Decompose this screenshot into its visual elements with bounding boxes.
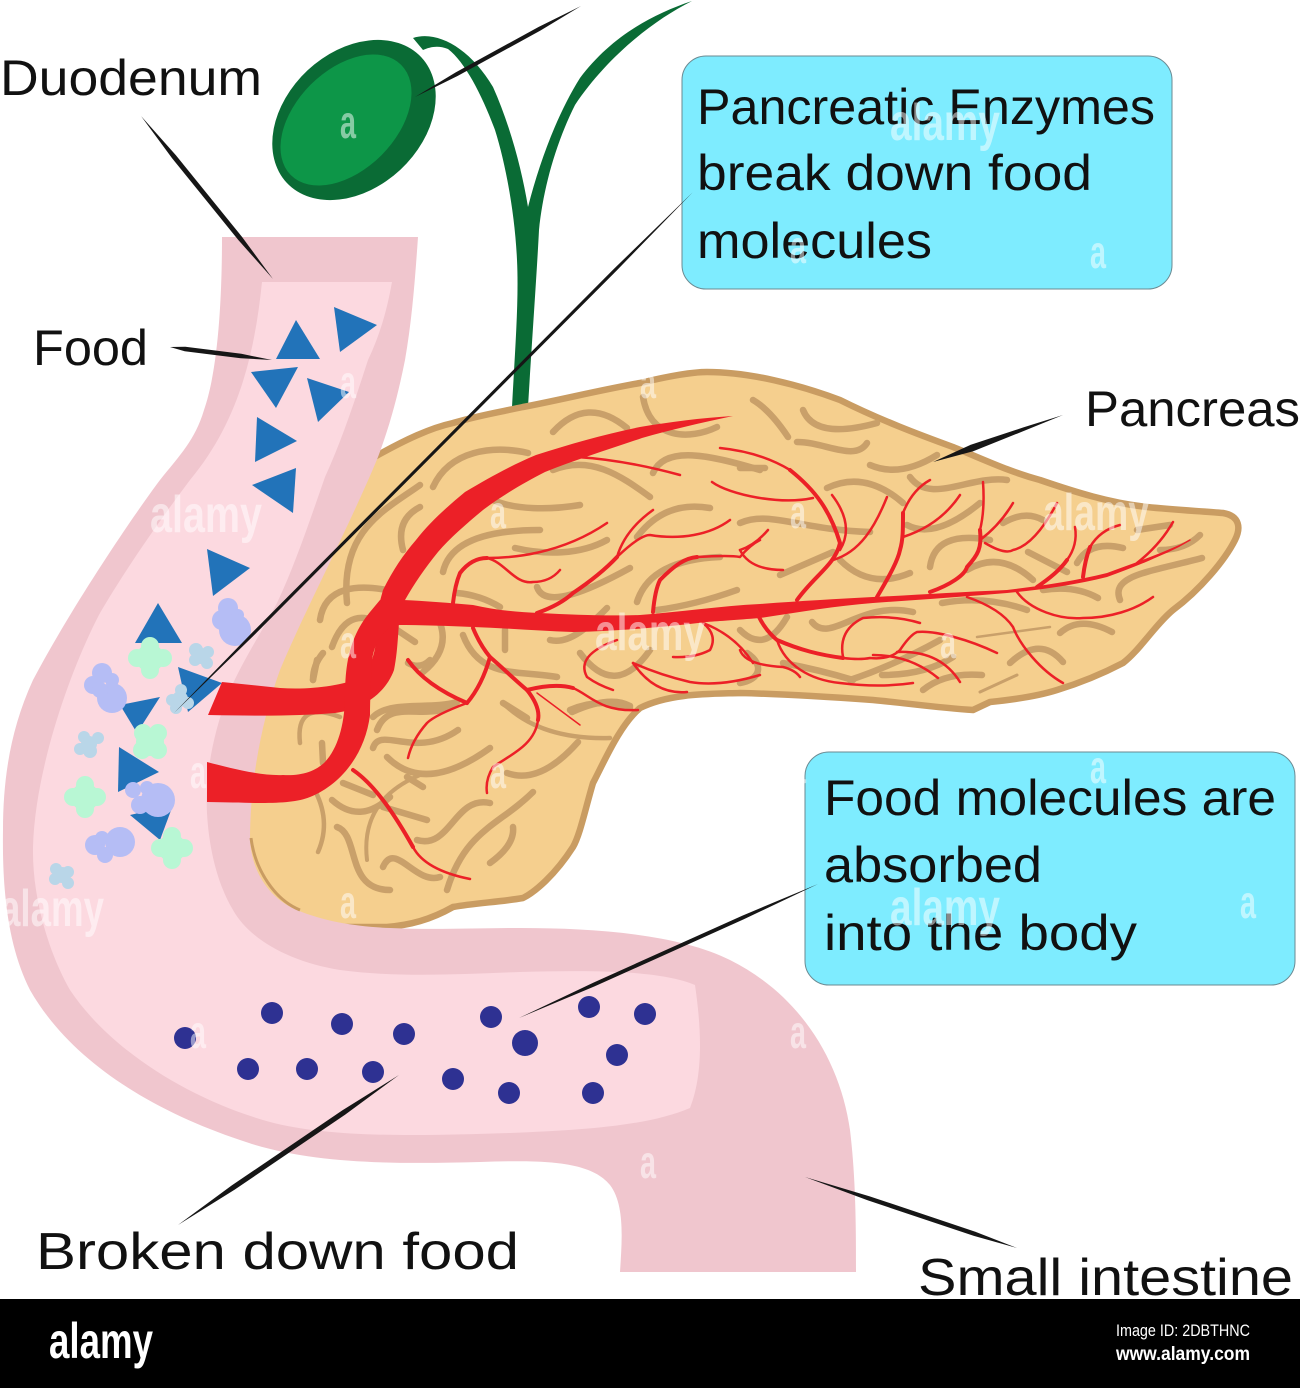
- watermarks: alamy: [0, 880, 104, 938]
- watermarks: a: [640, 1136, 656, 1188]
- intestine outer wall: [3, 237, 856, 1272]
- callout: food molecules absorbed: [805, 752, 1295, 985]
- watermarks: alamy: [890, 879, 1000, 937]
- pancreas lobule texture: [300, 397, 1202, 890]
- pancreas blood vessels: [207, 416, 1190, 879]
- label: Pancreas: Pancreas: [1085, 381, 1300, 437]
- watermarks: [0, 94, 1256, 1188]
- pointer: small intestine: [805, 1177, 1017, 1248]
- watermarks: a: [790, 221, 806, 273]
- label: Food: Food: [33, 320, 148, 376]
- footer logo: alamy: [49, 1313, 153, 1369]
- callout: pancreatic enzymes: molecules: [697, 213, 932, 269]
- label: Duodenum: Duodenum: [0, 50, 262, 106]
- watermarks: a: [790, 741, 806, 793]
- watermarks: a: [640, 356, 656, 408]
- pancreas body: [200, 372, 1238, 927]
- watermarks: a: [490, 486, 506, 538]
- pointer: food: [170, 347, 272, 360]
- small blue molecules: [49, 643, 214, 889]
- footer url: www.alamy.com: [1115, 1344, 1250, 1365]
- pointer: gallbladder: [415, 6, 581, 97]
- watermarks: a: [340, 876, 356, 928]
- watermarks: a: [790, 486, 806, 538]
- intestine inner lumen: [33, 282, 700, 1135]
- label: Small intestine: Small intestine: [918, 1249, 1293, 1307]
- broken down food dots: [174, 996, 656, 1104]
- pointer: broken down food: [178, 1075, 399, 1225]
- pancreas lower-left edge: [251, 838, 300, 910]
- pointer: duodenum: [141, 116, 273, 279]
- branches: [353, 448, 1190, 879]
- gallbladder and bile ducts: [240, 1, 692, 407]
- footer bar: [0, 1299, 1300, 1388]
- callout: food molecules absorbed: into the body: [824, 905, 1137, 961]
- food triangles: [118, 307, 377, 840]
- gallbladder sac: [240, 8, 468, 232]
- pointer: food molecules: [519, 884, 818, 1018]
- watermarks: a: [340, 616, 356, 668]
- callout: food molecules absorbed: Food molecules are: [824, 770, 1276, 826]
- watermarks: a: [940, 616, 956, 668]
- callout: pancreatic enzymes: Pancreatic Enzymes: [697, 79, 1155, 135]
- watermarks: a: [190, 746, 206, 798]
- watermarks: a: [340, 96, 356, 148]
- watermarks: a: [190, 1006, 206, 1058]
- gallbladder interior: [255, 29, 437, 211]
- pointer: pancreas: [933, 415, 1063, 462]
- watermarks: alamy: [150, 486, 262, 544]
- label: Broken down food: Broken down food: [36, 1223, 519, 1281]
- callout: pancreatic enzymes: [682, 56, 1172, 289]
- watermarks: a: [790, 1006, 806, 1058]
- watermarks: a: [490, 746, 506, 798]
- pancreas: [200, 372, 1238, 927]
- watermarks: alamy: [1043, 484, 1149, 542]
- watermarks: alamy: [595, 604, 705, 662]
- footer image id: Image ID: 2DBTHNC: [1116, 1321, 1250, 1340]
- watermarks: alamy: [890, 94, 1000, 152]
- lower main vessel: [207, 540, 1190, 803]
- large purple molecules: [84, 598, 251, 863]
- watermarks: a: [340, 356, 356, 408]
- watermarks: a: [1090, 226, 1106, 278]
- food molecules: [49, 598, 251, 889]
- watermarks: a: [1090, 741, 1106, 793]
- bile ducts: [413, 1, 692, 407]
- callout: food molecules absorbed: absorbed: [824, 837, 1042, 893]
- callout: pancreatic enzymes: break down food: [697, 145, 1092, 201]
- upper main vessel: [208, 416, 733, 716]
- pointer: enzymes: [174, 192, 693, 713]
- green molecules: [64, 637, 193, 869]
- watermarks: a: [1240, 876, 1256, 928]
